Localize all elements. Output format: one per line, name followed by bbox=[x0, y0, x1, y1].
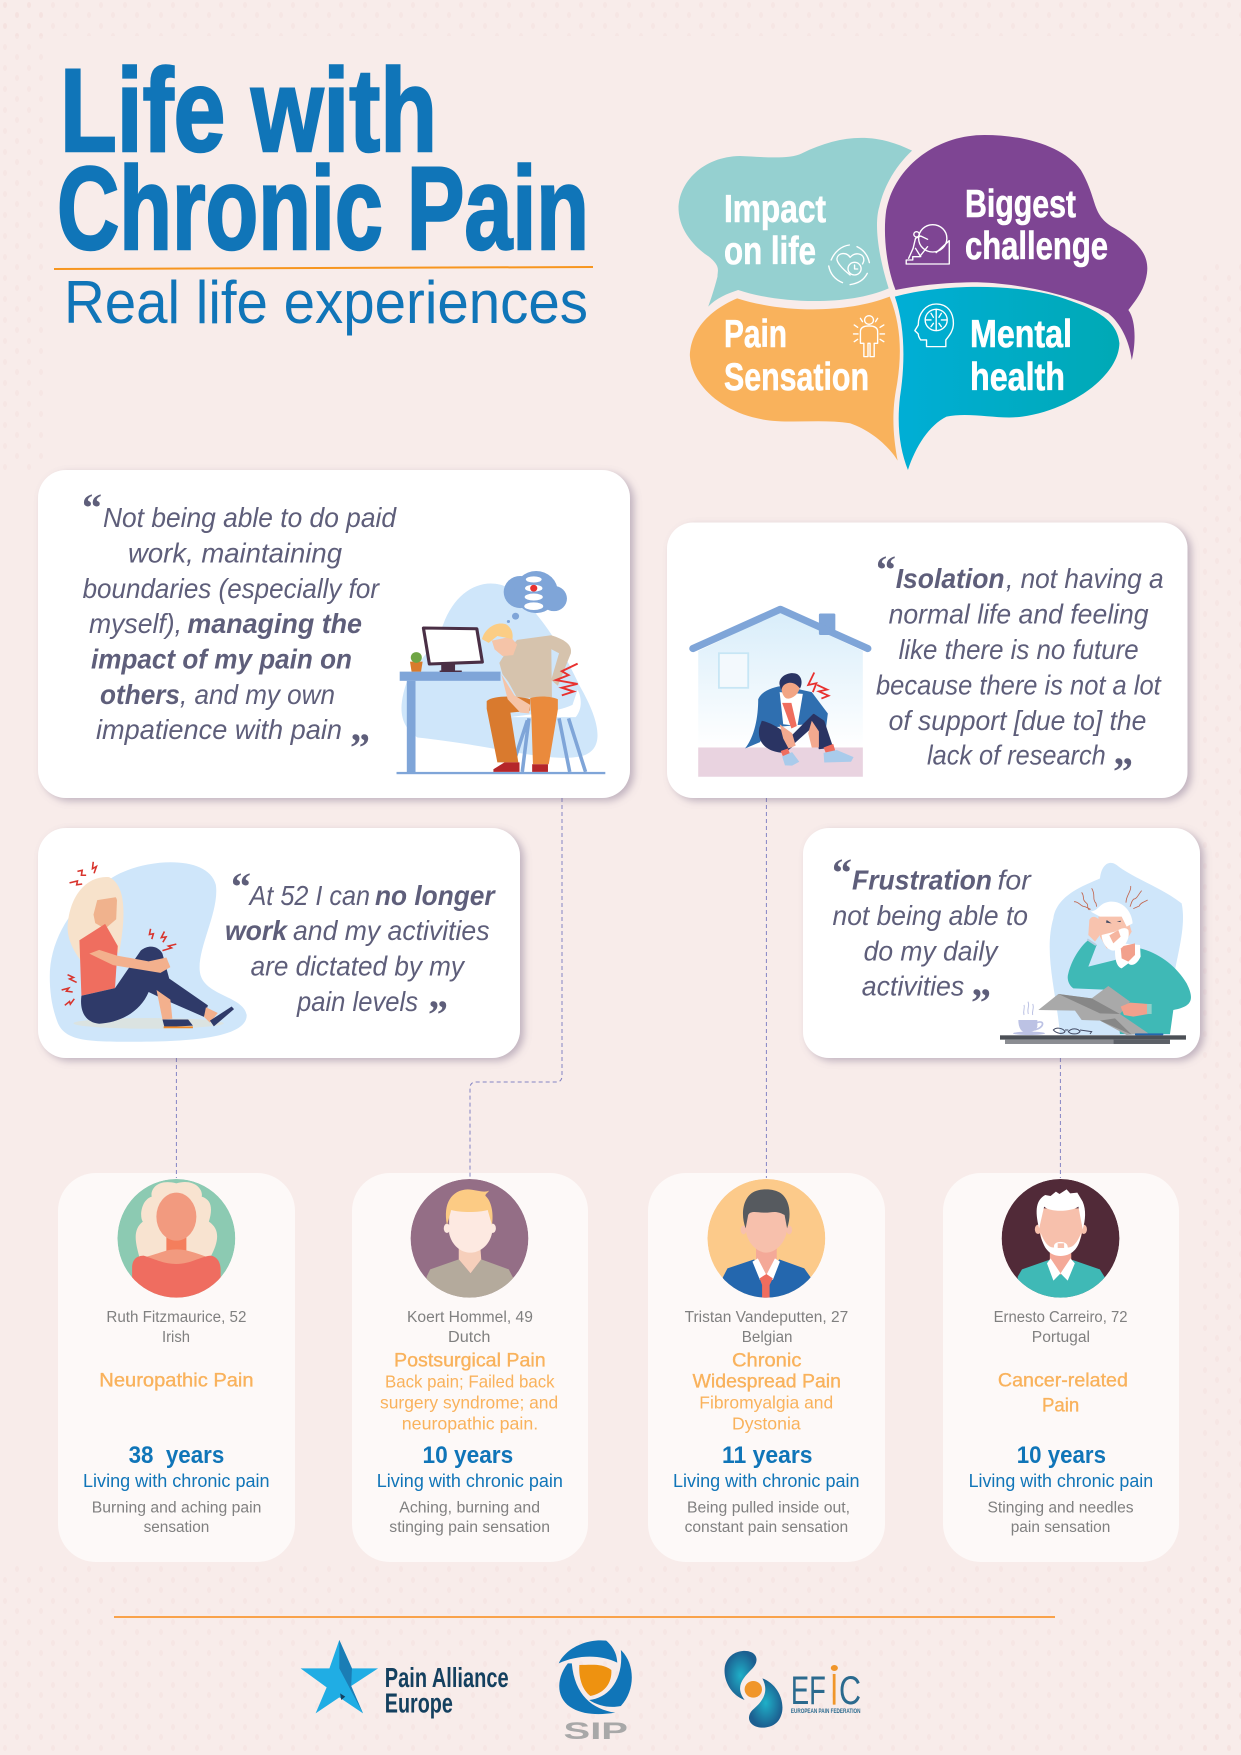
panel: quote managing impact: managing the bbox=[187, 608, 362, 639]
panel: quote isolation: like there is no future bbox=[899, 634, 1139, 665]
person card: Ruth Fitzmaurice: sensation bbox=[144, 1519, 209, 1536]
logo: EFIC: C bbox=[839, 1669, 861, 1713]
panel: quote isolation: “ bbox=[876, 547, 896, 592]
person card: Tristan Vandeputten: Widespread Pain bbox=[692, 1371, 841, 1392]
illustration: woman with knee pain bbox=[50, 862, 247, 1042]
person card: Ruth Fitzmaurice: Living with chronic pain bbox=[83, 1471, 270, 1491]
logo: SIP bbox=[559, 1640, 632, 1745]
panel: quote managing impact: , and my own bbox=[180, 679, 335, 710]
person card: Ernesto Carreiro: 10 years bbox=[1017, 1442, 1106, 1469]
person card: Tristan Vandeputten: Being pulled inside out, bbox=[687, 1500, 850, 1517]
icon: person with pain rays bbox=[854, 316, 885, 357]
panel: quote managing impact: others bbox=[100, 679, 180, 710]
speech bubbles: four categories: on life bbox=[724, 230, 816, 273]
logo: Pain Alliance Europe: Pain Alliance bbox=[385, 1662, 509, 1693]
speech bubbles: four categories: health bbox=[970, 356, 1065, 399]
panel: quote no longer work: and my activities bbox=[293, 915, 490, 946]
panel: quote managing impact: “ bbox=[82, 485, 102, 530]
speech bubbles: four categories bbox=[679, 135, 1147, 470]
bubble: pain sensation bbox=[690, 297, 900, 461]
person card: Tristan Vandeputten: Dystonia bbox=[732, 1413, 801, 1433]
title: Chronic Pain bbox=[57, 143, 589, 275]
person card: Koert Hommel: Dutch bbox=[448, 1329, 490, 1346]
person card: Ruth Fitzmaurice: Neuropathic Pain bbox=[99, 1371, 254, 1392]
person card: Tristan Vandeputten: Fibromyalgia and bbox=[699, 1392, 833, 1412]
panel: quote managing impact bbox=[38, 470, 630, 798]
person card: Ruth Fitzmaurice: 38 years bbox=[129, 1442, 224, 1469]
person card: Ernesto Carreiro: pain sensation bbox=[1011, 1519, 1110, 1536]
panel: quote isolation: Isolation bbox=[896, 563, 1005, 594]
person card: Ernesto Carreiro: Portugal bbox=[1032, 1329, 1090, 1346]
person card: Koert Hommel: Postsurgical Pain bbox=[394, 1351, 546, 1372]
panel: quote isolation: ” bbox=[1113, 749, 1133, 794]
panel: quote no longer work: pain levels bbox=[296, 986, 418, 1017]
person card: Koert Hommel: stinging pain sensation bbox=[389, 1519, 550, 1536]
speech bubbles: four categories: Pain bbox=[724, 313, 787, 356]
person card: Koert Hommel: surgery syndrome; and bbox=[380, 1392, 558, 1412]
person card: Ernesto Carreiro: Pain bbox=[1042, 1396, 1079, 1417]
person card: Koert Hommel: Koert Hommel, 49 bbox=[407, 1309, 533, 1326]
person card: Koert Hommel bbox=[352, 1173, 588, 1562]
title: Life with bbox=[60, 45, 437, 177]
speech bubbles: four categories: Impact bbox=[724, 188, 826, 231]
person card: Koert Hommel: Back pain; Failed back bbox=[385, 1371, 555, 1391]
person card: Ernesto Carreiro: Ernesto Carreiro, 72 bbox=[994, 1309, 1128, 1326]
panel: quote managing impact: ” bbox=[350, 725, 370, 770]
person card: Ernesto Carreiro: Stinging and needles bbox=[988, 1500, 1134, 1517]
logo: EFIC: EF bbox=[791, 1669, 826, 1713]
person card: Ruth Fitzmaurice bbox=[58, 1173, 295, 1562]
bubble: impact on life bbox=[679, 138, 912, 307]
panel: quote managing impact: work, maintaining bbox=[128, 538, 342, 569]
person card: Tristan Vandeputten: constant pain sensation bbox=[685, 1519, 848, 1536]
panel: quote managing impact: boundaries (especially for bbox=[83, 573, 381, 604]
illustration: man with back pain at desk bbox=[397, 571, 605, 774]
panel: quote isolation: of support [due to] the bbox=[889, 705, 1146, 736]
logo: SIP: SIP bbox=[564, 1718, 628, 1745]
person card: Ernesto Carreiro: Cancer-related bbox=[998, 1371, 1128, 1392]
person card: Koert Hommel: 10 years bbox=[422, 1442, 513, 1469]
panel: quote frustration: activities bbox=[862, 971, 964, 1002]
panel: quote isolation: , not having a bbox=[1006, 563, 1164, 594]
panel: quote managing impact: impact of my pain on bbox=[91, 644, 352, 675]
dashed connectors from quotes to people bbox=[176, 798, 1060, 1178]
logo: EFIC: EUROPEAN PAIN FEDERATION bbox=[791, 1709, 860, 1715]
person card: Ruth Fitzmaurice: Irish bbox=[162, 1329, 190, 1346]
person card: Ruth Fitzmaurice: Ruth Fitzmaurice, 52 bbox=[106, 1309, 246, 1326]
panel: quote isolation: normal life and feeling bbox=[889, 599, 1149, 630]
subtitle: Real life experiences bbox=[64, 269, 588, 336]
illustration: elderly man with headache and newspaper bbox=[1000, 863, 1191, 1044]
logo: Pain Alliance Europe bbox=[301, 1640, 509, 1719]
avatar: Tristan bbox=[707, 1179, 825, 1300]
panel: quote frustration: not being able to bbox=[832, 900, 1028, 931]
panel: quote frustration: do my daily bbox=[864, 936, 999, 967]
illustration: man sitting in house bbox=[693, 609, 868, 777]
bubble: mental health bbox=[895, 287, 1119, 470]
person card: Tristan Vandeputten: Tristan Vandeputten, 27 bbox=[685, 1309, 848, 1326]
person card: Ernesto Carreiro bbox=[943, 1173, 1179, 1562]
speech bubbles: four categories: challenge bbox=[965, 225, 1108, 268]
person card: Koert Hommel: Living with chronic pain bbox=[377, 1471, 563, 1491]
person card: Koert Hommel: neuropathic pain. bbox=[402, 1413, 538, 1433]
avatar: Ruth bbox=[117, 1179, 235, 1300]
panel: quote no longer work: no longer bbox=[375, 880, 497, 911]
logo: EFIC bbox=[725, 1651, 861, 1728]
panel: quote isolation: because there is not a lot bbox=[876, 670, 1162, 701]
panel: quote no longer work: ” bbox=[428, 992, 448, 1037]
panel: quote no longer work bbox=[38, 828, 520, 1058]
avatar: Koert bbox=[411, 1179, 528, 1300]
title bbox=[57, 45, 589, 275]
panel: quote isolation bbox=[667, 522, 1188, 798]
speech bubbles: four categories: Sensation bbox=[724, 356, 869, 399]
panel: quote managing impact: impatience with pain bbox=[96, 714, 342, 745]
panel: quote frustration: ” bbox=[971, 980, 991, 1025]
panel: quote frustration bbox=[803, 828, 1200, 1058]
logo: Pain Alliance Europe: Europe bbox=[385, 1688, 453, 1719]
person card: Tristan Vandeputten: Belgian bbox=[742, 1329, 792, 1346]
panel: quote managing impact: Not being able to do paid bbox=[103, 502, 397, 533]
panel: quote no longer work: work bbox=[225, 915, 288, 946]
avatar: Ernesto bbox=[1002, 1179, 1119, 1300]
panel: quote frustration: Frustration bbox=[852, 865, 992, 896]
person card: Ernesto Carreiro: Living with chronic pain bbox=[969, 1471, 1153, 1491]
panel: quote no longer work: are dictated by my bbox=[251, 950, 466, 982]
panel: quote no longer work: “ bbox=[231, 864, 251, 909]
person card: Tristan Vandeputten: Chronic bbox=[732, 1351, 801, 1372]
panel: quote managing impact: myself), bbox=[89, 608, 182, 639]
person card: Tristan Vandeputten bbox=[648, 1173, 885, 1562]
bubble: biggest challenge bbox=[885, 135, 1147, 360]
speech bubbles: four categories: Biggest bbox=[965, 183, 1076, 226]
icon: head with brain bbox=[915, 304, 953, 347]
person card: Tristan Vandeputten: 11 years bbox=[722, 1442, 812, 1469]
person card: Ruth Fitzmaurice: Burning and aching pain bbox=[92, 1500, 261, 1517]
panel: quote isolation: lack of research bbox=[927, 740, 1106, 771]
panel: quote frustration: “ bbox=[832, 850, 852, 895]
speech bubbles: four categories: Mental bbox=[970, 313, 1072, 356]
person card: Tristan Vandeputten: Living with chronic pain bbox=[673, 1471, 860, 1491]
icon: person pushing boulder bbox=[906, 225, 949, 264]
panel: quote frustration: for bbox=[998, 865, 1032, 896]
icon: heart and clock cycle bbox=[829, 245, 869, 285]
panel: quote no longer work: At 52 I can bbox=[248, 880, 370, 911]
person card: Koert Hommel: Aching, burning and bbox=[399, 1500, 540, 1517]
